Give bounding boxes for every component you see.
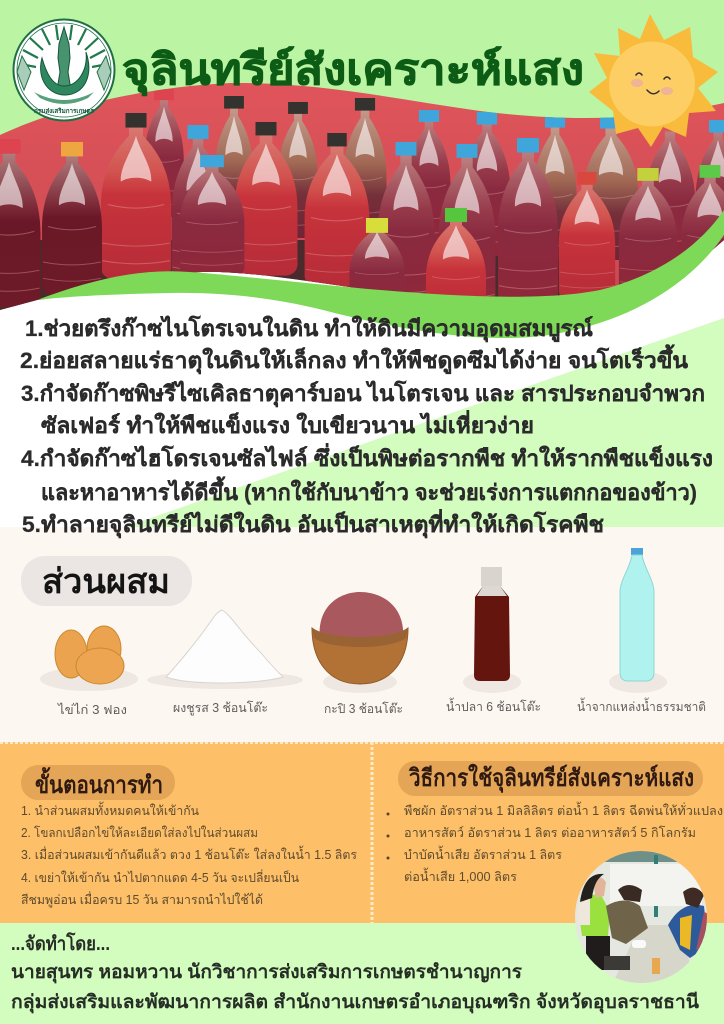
icon: smiling sun (589, 14, 718, 147)
step 3: 3. เมื่อส่วนผสมเข้ากันดีแล้ว ตวง 1 ช้อนโต๊ะ ใส่ลงในน้ำ 1.5 ลิตร (21, 845, 357, 862)
step 1: 1. นำส่วนผสมทั้งหมดคนให้เข้ากัน (21, 801, 199, 818)
heading pill: ขั้นตอนการทำ: ขั้นตอนการทำ (35, 766, 163, 799)
label: natural water: น้ำจากแหล่งน้ำธรรมชาติ (577, 697, 706, 714)
page background: top green (0, 0, 724, 216)
panel: ingredients (0, 527, 724, 742)
photo: training group (575, 851, 712, 986)
step 4: 4. เขย่าให้เข้ากัน นำไปตากแดด 4-5 วัน จะเปลี่ยนเป็น (21, 869, 299, 885)
step 4 continued: สีชมพูอ่อน เมื่อครบ 15 วัน สามารถนำไปใช้ได้ (21, 891, 263, 908)
icon: fish sauce bottle (463, 567, 521, 693)
logo: seal name: กรมส่งเสริมการเกษตร (34, 107, 94, 115)
item 2: 2.ย่อยสลายแร่ธาตุในดินให้เล็กลง ทำให้พืชดูดซึมได้ง่าย จนโตเร็วขึ้น (20, 344, 688, 375)
item 3 second line: ซัลเฟอร์ ทำให้พืชแข็งแรง ใบเขียวนาน ไม่เหี่ยวง่าย (41, 409, 534, 438)
icon: water bottle (609, 548, 667, 693)
footer credit: made by: ...จัดทำโดย... (11, 932, 110, 955)
usage: vegetables: พืชผัก อัตราส่วน 1 มิลลิลิตร ต่อน้ำ 1 ลิตร ฉีดพ่นให้ทั่วแปลง (404, 801, 723, 818)
usage: animal feed: อาหารสัตว์ อัตราส่วน 1 ลิตร ต่ออาหารสัตว์ 5 กิโลกรัม (404, 825, 696, 840)
back row of bottles (144, 89, 724, 272)
panel: method steps (21, 765, 357, 908)
label: MSG: ผงชูรส 3 ช้อนโต๊ะ (173, 700, 268, 716)
panel: footer (0, 923, 724, 1024)
usage: wastewater: บำบัดน้ำเสีย อัตราส่วน 1 ลิตร (404, 845, 562, 862)
item 5: 5.ทำลายจุลินทรีย์ไม่ดีในดิน อันเป็นสาเหตุที่ทำให้เกิดโรคพืช (22, 508, 604, 539)
photo: red fermenting bottles (0, 83, 724, 310)
panel: usage (386, 761, 723, 884)
bullet marks (386, 812, 390, 860)
logo: Department of Agricultural Extension seal (14, 20, 114, 120)
middle row of bottles (101, 113, 558, 314)
usage: wastewater continued: ต่อน้ำเสีย 1,000 ลิตร (404, 867, 517, 884)
icon: shrimp paste bowl (312, 592, 408, 693)
item 4 first line: 4.กำจัดก๊าซไฮโดรเจนซัลไฟล์ ซึ่งเป็นพิษต่อรากพืช ทำให้รากพืชแข็งแรง (21, 442, 713, 471)
dark gaps behind the bottles (0, 240, 560, 310)
step 2: 2. โขลกเปลือกไข่ให้ละเอียดใส่ลงไปในส่วนผสม (21, 825, 258, 840)
page background: white body (0, 216, 724, 530)
label: eggs: ไข่ไก่ 3 ฟอง (57, 703, 127, 717)
item 1: 1.ช่วยตรึงก๊าซไนโตรเจนในดิน ทำให้ดินมีความอุดมสมบูรณ์ (25, 315, 593, 343)
heading pill: ส่วนผสม: ส่วนผสม (42, 563, 170, 601)
item 3 first line: 3.กำจัดก๊าซพิษรีไซเคิลธาตุคาร์บอน ไนโตรเจน และ สารประกอบจำพวก (21, 380, 705, 408)
footer credit: office: กลุ่มส่งเสริมและพัฒนาการผลิต สำนักงานเกษตรอำเภอบุณฑริก จังหวัดอุบลราชธานี (11, 991, 699, 1014)
footer credit: author: นายสุนทร หอมหวาน นักวิชาการส่งเสริมการเกษตรชำนาญการ (11, 962, 523, 984)
title: จุลินทรีย์สังเคราะห์แสง (122, 46, 584, 96)
benefits list (20, 315, 713, 539)
panel: orange instructions band (0, 742, 724, 923)
background: light green diagonal (125, 318, 724, 527)
icon: eggs (40, 626, 138, 691)
icon: MSG pile (147, 610, 303, 689)
green swoosh under photo (37, 210, 724, 338)
item 4 second line: และหาอาหารได้ดีขึ้น (หากใช้กับนาข้าว จะช่วยเร่งการแตกกอของข้าว) (41, 476, 697, 505)
front row of bottles (0, 139, 724, 307)
heading pill: ส่วนผสม (21, 556, 192, 606)
label: shrimp paste: กะปิ 3 ช้อนโต๊ะ (324, 701, 403, 716)
heading pill: ขั้นตอนการทำ (21, 765, 175, 800)
label: fish sauce: น้ำปลา 6 ช้อนโต๊ะ (446, 697, 541, 714)
